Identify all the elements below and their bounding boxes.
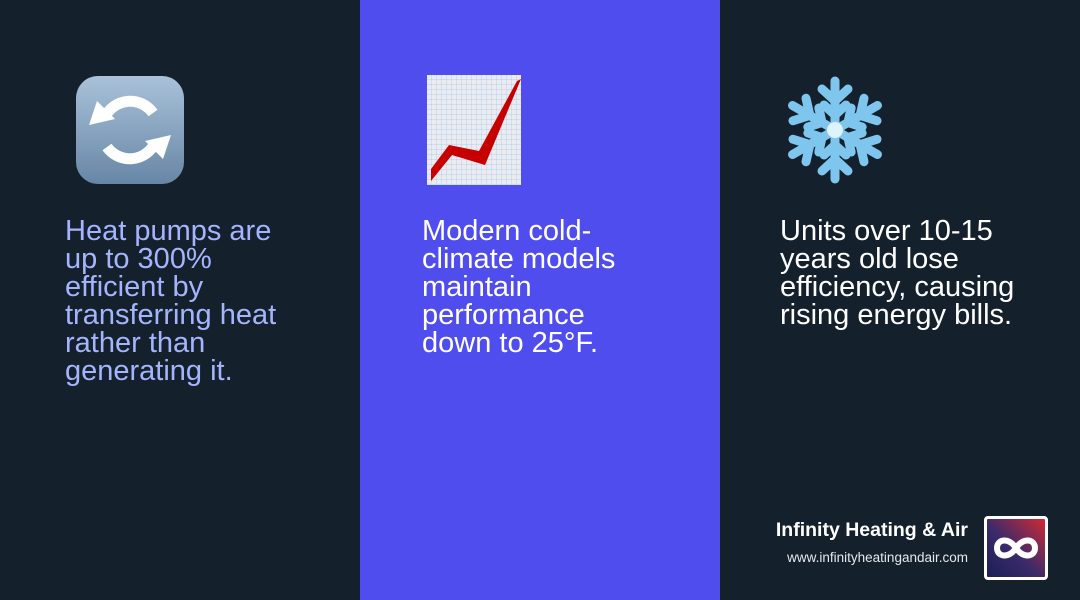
text: efficiency: efficient by — [65, 271, 203, 303]
text: efficiency: transferring heat — [65, 299, 276, 331]
text: cold-climate — [422, 215, 615, 359]
text: cold-climate: down to 25°F. — [422, 327, 598, 359]
text: aging units: years old lose — [780, 243, 959, 275]
panel: efficiency — [0, 0, 360, 600]
brand name: Infinity Heating & Air — [776, 519, 968, 541]
text: aging units: rising energy bills. — [780, 299, 1012, 331]
text: cold-climate: climate models — [422, 243, 615, 275]
text: efficiency — [65, 215, 276, 387]
text: efficiency: up to 300% — [65, 243, 212, 275]
text: efficiency: Heat pumps are — [65, 215, 271, 247]
brand url: www.infinityheatingandair.com — [787, 550, 968, 565]
panel: aging units — [720, 0, 1080, 600]
text: aging units: efficiency, causing — [780, 271, 1014, 303]
text: cold-climate: maintain — [422, 271, 532, 303]
text: aging units: Units over 10-15 — [780, 215, 993, 247]
text: efficiency: rather than — [65, 327, 205, 359]
panel: cold-climate — [360, 0, 720, 600]
brand block — [776, 516, 1048, 580]
icon: snowflake — [788, 76, 882, 184]
text: cold-climate: performance — [422, 299, 585, 331]
text: efficiency: generating it. — [65, 355, 233, 387]
icon: refresh arrows — [76, 76, 184, 184]
icon: chart — [427, 75, 521, 185]
text: cold-climate: Modern cold- — [422, 215, 591, 247]
logo: infinity — [984, 516, 1048, 580]
text: aging units — [780, 215, 1014, 331]
